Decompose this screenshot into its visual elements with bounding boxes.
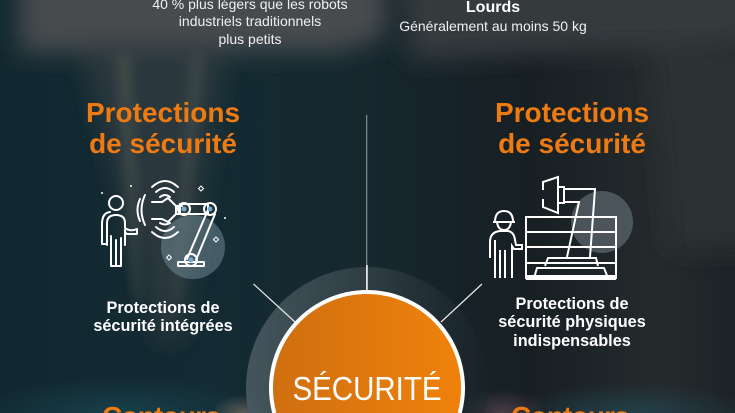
heading: right safety protections — [495, 97, 649, 158]
heading: left safety protections — [86, 97, 240, 158]
orange disc — [271, 292, 463, 413]
icon: collaborative robot and person — [101, 180, 226, 279]
central safety circle — [246, 265, 486, 413]
text: physical protections — [498, 295, 646, 350]
heading: left safety protections: de sécurité — [89, 128, 237, 158]
text: weight, right column: Généralement au moins 50 kg — [399, 18, 587, 34]
text: built-in protections: sécurité intégrées — [93, 317, 233, 335]
connector lines — [253, 284, 482, 322]
label: SÉCURITÉ — [292, 370, 442, 407]
text: physical protections: Protections de — [515, 295, 629, 313]
heading: left safety protections: Protections — [86, 97, 240, 128]
heading: right safety protections: de sécurité — [498, 128, 646, 158]
heading: right safety protections: Protections — [495, 97, 649, 128]
halo — [246, 267, 488, 413]
text: built-in protections: Protections de — [106, 299, 220, 317]
icon: industrial robot behind fence with worker — [489, 176, 633, 280]
text: weight, left column: plus petits — [218, 31, 282, 47]
text: physical protections: indispensables — [513, 332, 631, 350]
text: weight, right column — [399, 0, 587, 34]
text: physical protections: sécurité physiques — [498, 313, 646, 331]
text: built-in protections — [93, 299, 233, 335]
text: weight, left column — [152, 0, 348, 47]
text: weight, left column: industriels traditionnels — [179, 13, 321, 29]
